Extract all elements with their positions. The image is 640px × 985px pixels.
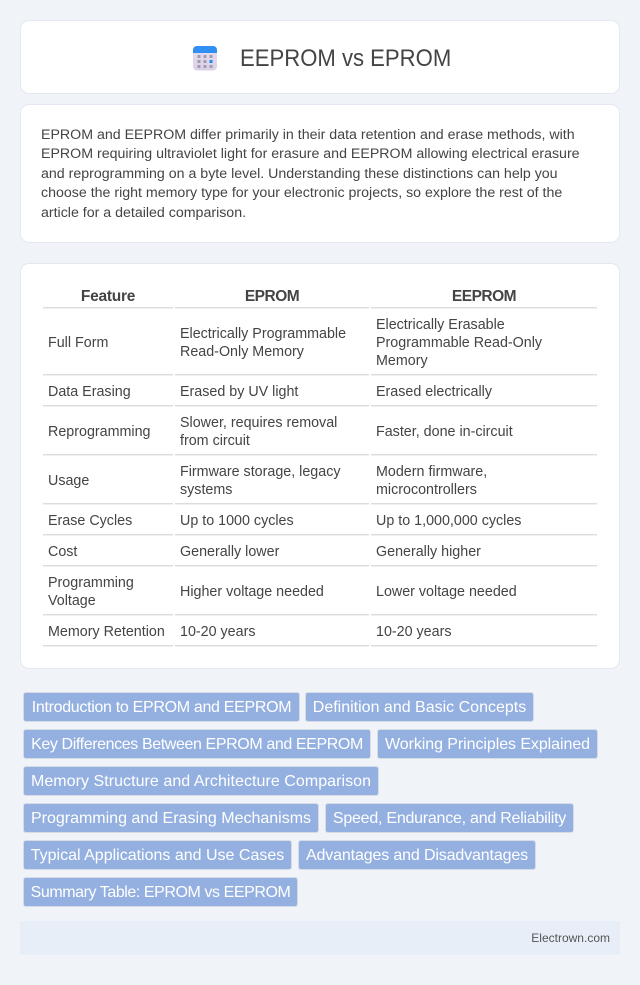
tag	[305, 692, 534, 722]
row: reprogramming	[48, 415, 513, 449]
row: data erasing: Erased by UV light	[180, 384, 298, 400]
tag: Memory Structure and Architecture Comparison	[31, 773, 371, 790]
column headers: EPROM	[245, 288, 299, 305]
panel: comparison table	[20, 263, 620, 669]
row: programming voltage: Programming	[48, 575, 134, 591]
row: usage: systems	[180, 482, 232, 498]
intro paragraph: EPROM requiring ultraviolet light for erasure and EEPROM allowing electrical erasure	[41, 146, 580, 162]
tag	[23, 729, 371, 759]
row: usage: Usage	[48, 473, 89, 489]
tag	[325, 803, 574, 833]
row: memory retention: 10-20 years	[376, 624, 452, 640]
row: full form: Programmable Read-Only	[376, 335, 542, 351]
tag: Key Differences Between EPROM and EEPROM	[31, 736, 363, 753]
row: erase cycles: Erase Cycles	[48, 513, 132, 529]
tag: Definition and Basic Concepts	[313, 699, 526, 716]
tag: Advantages and Disadvantages	[306, 847, 528, 864]
row: full form: Electrically Programmable	[180, 326, 346, 342]
row: programming voltage: Voltage	[48, 593, 96, 609]
row: reprogramming: from circuit	[180, 433, 250, 449]
row: full form: Electrically Erasable	[376, 317, 505, 333]
row: reprogramming: Slower, requires removal	[180, 415, 337, 431]
tag	[23, 766, 379, 796]
tag	[23, 877, 298, 907]
row: cost: Generally higher	[376, 544, 481, 560]
comparison table	[43, 288, 597, 647]
row: erase cycles	[48, 513, 521, 529]
intro paragraph	[41, 126, 580, 220]
row: programming voltage: Higher voltage needed	[180, 584, 324, 600]
footer bar	[20, 921, 620, 955]
tag: Working Principles Explained	[385, 736, 590, 753]
intro paragraph: choose the right memory type for your electronic projects, so explore the rest of the	[41, 185, 562, 201]
row: cost: Cost	[48, 544, 77, 560]
icon: calendar	[193, 46, 217, 70]
row: erase cycles: Up to 1000 cycles	[180, 513, 294, 529]
row: full form: Full Form	[48, 335, 108, 351]
header card	[20, 20, 620, 94]
row: memory retention: 10-20 years	[180, 624, 256, 640]
tag	[23, 692, 300, 722]
row: data erasing: Erased electrically	[376, 384, 492, 400]
row: reprogramming: Faster, done in-circuit	[376, 424, 513, 440]
row: usage: Firmware storage, legacy	[180, 464, 340, 480]
row: programming voltage: Lower voltage needed	[376, 584, 517, 600]
row: data erasing: Data Erasing	[48, 384, 131, 400]
row: erase cycles: Up to 1,000,000 cycles	[376, 513, 521, 529]
row: programming voltage	[48, 575, 517, 609]
column headers: Feature	[81, 288, 135, 305]
tag	[377, 729, 598, 759]
panel: introduction	[20, 104, 620, 243]
topic tags	[23, 692, 598, 907]
intro paragraph: EPROM and EEPROM differ primarily in their data retention and erase methods, with	[41, 126, 575, 142]
title: EEPROM vs EPROM	[240, 45, 451, 72]
footer credit: Electrown.com	[531, 931, 610, 945]
row: memory retention: Memory Retention	[48, 624, 165, 640]
tag	[298, 840, 536, 870]
tag: Programming and Erasing Mechanisms	[31, 810, 311, 827]
tag: Typical Applications and Use Cases	[31, 847, 284, 864]
column headers: EEPROM	[452, 288, 516, 305]
row: full form	[48, 317, 542, 369]
row: full form: Memory	[376, 353, 428, 369]
tag: Introduction to EPROM and EEPROM	[32, 699, 291, 716]
column headers	[81, 288, 516, 305]
row: usage: microcontrollers	[376, 482, 477, 498]
intro paragraph: and reprogramming on a byte level. Understanding these distinctions can help you	[41, 166, 558, 182]
row: cost	[48, 544, 481, 560]
row: data erasing	[48, 384, 492, 400]
tag	[23, 803, 319, 833]
tag	[23, 840, 292, 870]
row: full form: Read-Only Memory	[180, 344, 304, 360]
row: cost: Generally lower	[180, 544, 279, 560]
tag: Speed, Endurance, and Reliability	[333, 810, 566, 827]
intro paragraph: article for a detailed comparison.	[41, 204, 246, 220]
row: usage: Modern firmware,	[376, 464, 487, 480]
row: reprogramming: Reprogramming	[48, 424, 151, 440]
tag: Summary Table: EPROM vs EEPROM	[31, 884, 290, 901]
row: usage	[48, 464, 487, 498]
row: memory retention	[48, 624, 452, 640]
